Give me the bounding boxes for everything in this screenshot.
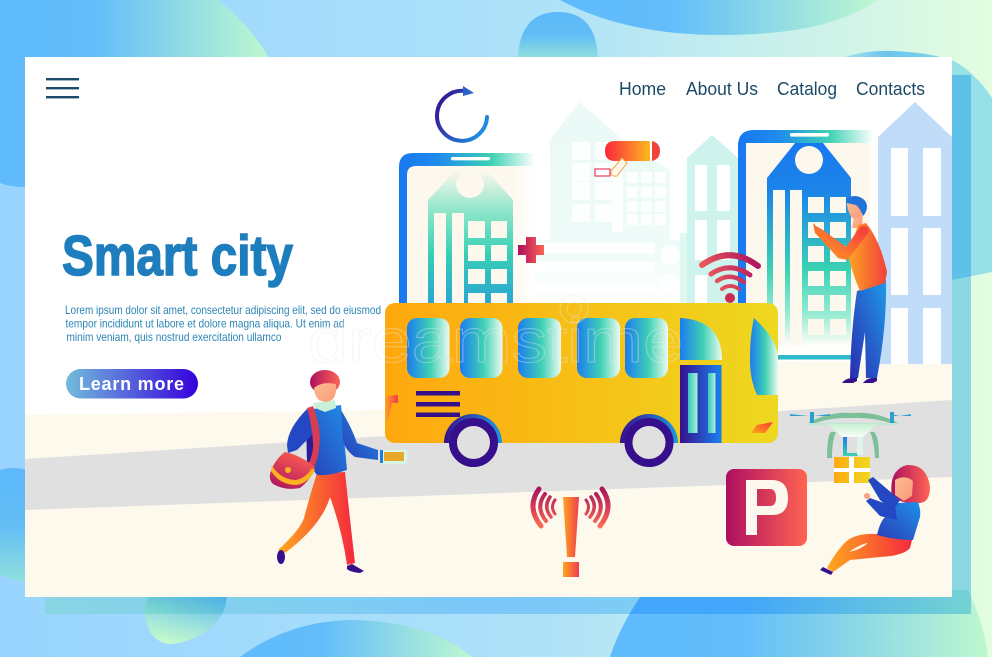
pale blue building	[878, 102, 952, 364]
bag strap	[306, 406, 320, 470]
navigation: Contacts	[856, 79, 925, 99]
button: learn more: Learn more	[79, 374, 184, 394]
navigation	[619, 79, 925, 99]
title: Smart city	[62, 224, 293, 288]
man touching phone	[813, 196, 887, 383]
yellow bus	[385, 303, 778, 463]
man arm	[813, 223, 869, 260]
teal building	[428, 170, 513, 304]
icon: parking sign	[726, 469, 807, 546]
man trousers	[850, 280, 886, 378]
woman hair back	[891, 465, 930, 503]
phone with teal building	[399, 153, 535, 304]
button: learn more	[66, 369, 198, 398]
parcel	[834, 457, 870, 483]
bus windows	[407, 318, 778, 395]
woman legs	[827, 534, 913, 572]
woman sitting and reaching for parcel	[820, 465, 930, 575]
blue building	[767, 143, 851, 345]
body text	[65, 304, 381, 344]
icon: alert with signal waves	[533, 489, 608, 577]
woman face	[895, 477, 913, 501]
hamburger menu icon	[46, 78, 79, 98]
body text: tempor incididunt ut labore et dolore magna aliqua. Ut enim ad	[66, 318, 344, 330]
navigation: Catalog	[777, 79, 837, 99]
man head	[852, 214, 863, 228]
body text: minim veniam, quis nostrud exercitation ullamco	[66, 331, 282, 344]
ground	[25, 361, 952, 597]
collar and head	[313, 400, 336, 412]
woman arms	[868, 477, 900, 511]
body text: Lorem ipsum dolor sit amet, consectetur adipiscing elit, sed do eiusmod	[65, 304, 381, 317]
back panel shadow layer	[45, 75, 971, 614]
legs	[278, 472, 355, 565]
ticket	[380, 450, 407, 464]
rear wheel	[444, 414, 502, 463]
man shirt	[848, 223, 887, 291]
main white page panel	[25, 57, 952, 597]
icon: wifi signal	[702, 255, 758, 303]
woman torso	[877, 502, 920, 540]
delivery drone with parcel	[790, 412, 911, 483]
icon: refresh arrow	[437, 86, 487, 141]
navigation: Home	[619, 79, 666, 99]
icon: medical cross	[518, 237, 544, 263]
bag	[270, 452, 315, 489]
rear lamp	[385, 395, 398, 420]
icon: security camera	[595, 141, 660, 176]
bus door	[680, 365, 722, 443]
navigation: About Us	[686, 79, 758, 99]
road	[25, 400, 952, 510]
sweater	[306, 405, 347, 475]
head lamp	[751, 422, 773, 433]
watermark: dreamstime	[308, 307, 683, 376]
phone with blue building	[738, 130, 873, 360]
bus vents	[416, 391, 460, 417]
front wheel	[620, 414, 678, 463]
man walking with bag and ticket	[270, 370, 407, 573]
faded mint city buildings	[535, 102, 738, 303]
